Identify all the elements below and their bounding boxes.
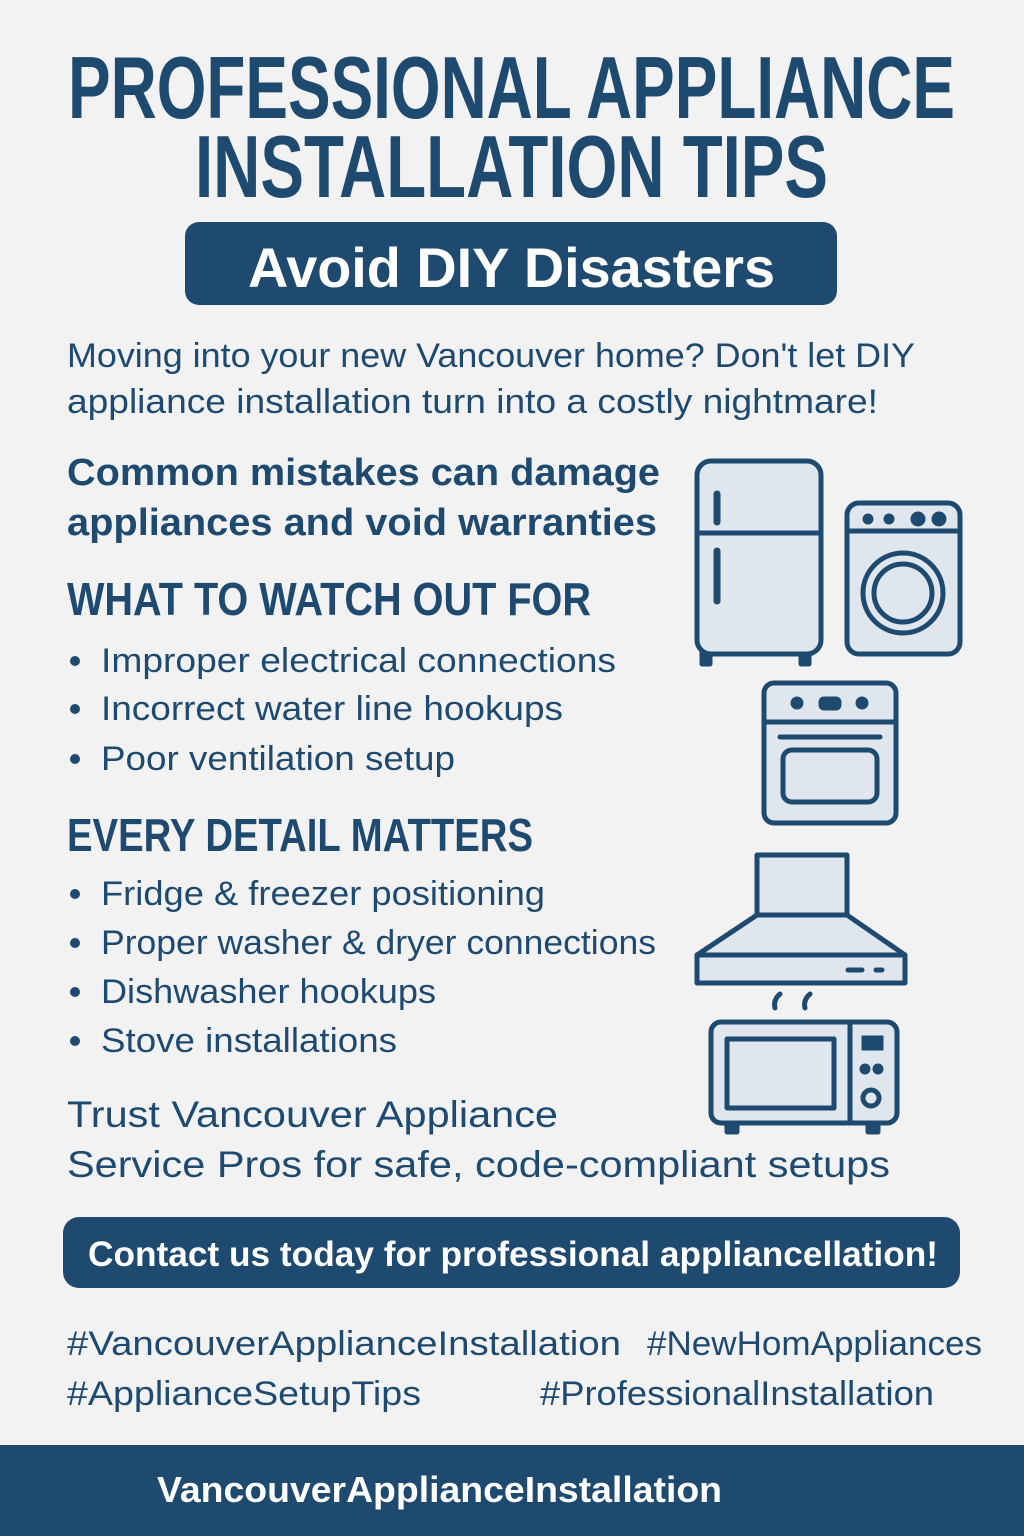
- list: watch out: Incorrect water line hookups: [101, 690, 563, 728]
- intro text: Moving into your new Vancouver home? Don't let DIY: [67, 337, 915, 375]
- warning heading: Common mistakes can damage: [67, 452, 660, 494]
- list: details: Proper washer & dryer connections: [101, 924, 656, 962]
- list: details: Dishwasher hookups: [101, 973, 436, 1011]
- icon: oven: [764, 683, 896, 823]
- trust statement: Service Pros for safe, code-compliant setups: [67, 1144, 890, 1185]
- icon: steam: [775, 994, 810, 1008]
- CTA button: [63, 1217, 960, 1288]
- icon: washer: [847, 503, 960, 654]
- trust statement: Trust Vancouver Appliance: [67, 1094, 558, 1135]
- hashtags: [67, 1325, 982, 1413]
- title: INSTALLATION TIPS: [195, 117, 828, 216]
- icon: fridge: [697, 461, 821, 664]
- warning heading: [67, 452, 660, 544]
- list: details: Stove installations: [101, 1022, 397, 1060]
- footer bar: VancouverApplianceInstallation: [157, 1469, 722, 1510]
- trust statement: [67, 1094, 890, 1185]
- heading: what to watch out for: WHAT TO WATCH OUT FOR: [67, 573, 591, 625]
- title: [68, 38, 955, 216]
- icons: [697, 461, 960, 1132]
- subtitle pill: [185, 222, 837, 305]
- icon: microwave: [711, 1022, 897, 1132]
- hashtags: #NewHomAppliances: [647, 1325, 982, 1363]
- subtitle pill: Avoid DIY Disasters: [248, 236, 775, 299]
- hashtags: #ApplianceSetupTips: [67, 1375, 421, 1413]
- icon: range hood: [697, 855, 905, 983]
- list: details: [70, 875, 656, 1060]
- list: watch out: Poor ventilation setup: [101, 740, 455, 778]
- intro text: appliance installation turn into a costly nightmare!: [67, 383, 878, 421]
- hashtags: #ProfessionalInstallation: [540, 1375, 934, 1413]
- intro text: [67, 337, 915, 421]
- heading: every detail matters: EVERY DETAIL MATTERS: [67, 809, 533, 861]
- hashtags: #VancouverApplianceInstallation: [67, 1325, 621, 1363]
- list: watch out: Improper electrical connections: [101, 642, 616, 680]
- list: watch out: [70, 642, 616, 778]
- CTA button: Contact us today for professional appliancellation!: [88, 1235, 938, 1274]
- list: details: Fridge & freezer positioning: [101, 875, 545, 913]
- warning heading: appliances and void warranties: [67, 502, 657, 544]
- footer bar: [0, 1445, 1024, 1536]
